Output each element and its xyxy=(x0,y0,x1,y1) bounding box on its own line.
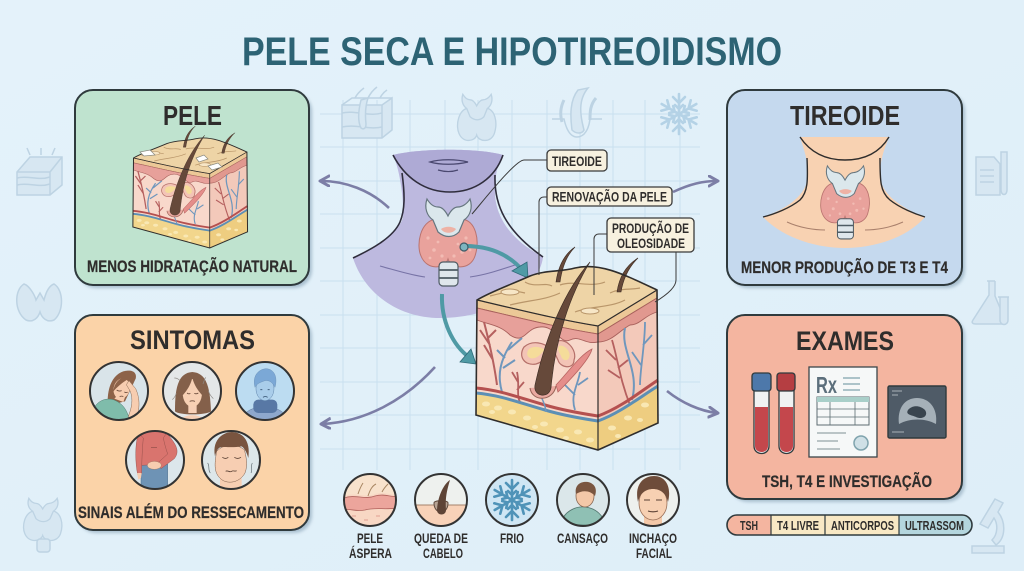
icon: woman with hair loss xyxy=(163,362,221,421)
faint icons right xyxy=(972,152,1009,553)
tab: tsh: TSH xyxy=(740,518,758,533)
panel: tireoide xyxy=(727,90,965,288)
thyroid gland xyxy=(419,199,477,286)
icon: lab report: Rx xyxy=(816,372,837,398)
label: produção de oleosidade: OLEOSIDADE xyxy=(617,235,685,251)
bottom labels: FRIO xyxy=(500,530,524,546)
test tabs xyxy=(727,515,972,535)
bottom labels: PELE xyxy=(357,530,383,546)
faint snowflake icon xyxy=(659,94,699,134)
label: produção de oleosidade: PRODUÇÃO DE xyxy=(612,219,689,236)
central grid xyxy=(320,100,700,470)
faint background icons xyxy=(17,87,602,552)
arrow: to sintomas xyxy=(322,367,435,424)
icon: inchaço facial xyxy=(627,474,679,528)
icon: man with facial swelling xyxy=(202,431,260,491)
icon: neck with thyroid xyxy=(763,137,925,248)
bottom labels xyxy=(349,530,677,561)
icon: person feeling cold xyxy=(236,362,294,426)
bottom labels: QUEDA DE xyxy=(414,530,468,546)
caption: tireoide: MENOR PRODUÇÃO DE T3 E T4 xyxy=(741,257,949,277)
bottom labels: FACIAL xyxy=(636,545,672,561)
arrow: to pele xyxy=(321,181,389,208)
caption: pele: MENOS HIDRATAÇÃO NATURAL xyxy=(87,256,297,276)
icon: queda de cabelo xyxy=(415,474,467,526)
icon: blood tubes xyxy=(752,373,795,454)
label: renovação da pele: RENOVAÇÃO DA PELE xyxy=(552,188,667,204)
label: tireoide: TIREOIDE xyxy=(552,153,602,169)
heading: pele: PELE xyxy=(163,100,222,131)
label: renovação da pele xyxy=(539,187,672,275)
heading: exames: EXAMES xyxy=(796,326,894,356)
icon: ultrasound xyxy=(888,386,946,438)
arrows: teal thyroid flow xyxy=(442,243,528,364)
icon: woman with headache xyxy=(90,362,148,425)
arrow: to exames xyxy=(667,391,717,413)
bottom labels: ÁSPERA xyxy=(349,545,392,561)
bottom labels: INCHAÇO xyxy=(629,530,677,546)
tab: ultrassom: ULTRASSOM xyxy=(905,518,964,533)
heading: sintomas: SINTOMAS xyxy=(130,325,255,355)
panel: exames xyxy=(727,315,965,502)
caption: exames: TSH, T4 E INVESTIGAÇÃO xyxy=(762,471,932,491)
bottom labels: CABELO xyxy=(423,545,463,561)
arrow: to tireoide xyxy=(673,181,717,192)
heading: tireoide: TIREOIDE xyxy=(790,100,900,131)
bottom labels: CANSAÇO xyxy=(557,530,608,546)
tab: t4 livre: T4 LIVRE xyxy=(777,518,819,533)
caption: sintomas: SINAIS ALÉM DO RESSECAMENTO xyxy=(78,503,304,522)
tab: anticorpos: ANTICORPOS xyxy=(831,518,894,533)
skin cross-section block xyxy=(476,247,658,450)
icon: cansaço xyxy=(557,474,609,526)
label: produção de oleosidade xyxy=(594,218,694,302)
icon: lab report xyxy=(809,367,877,457)
neck illustration xyxy=(353,150,543,318)
icon: pele áspera xyxy=(344,474,396,526)
icon: frio xyxy=(486,474,538,526)
label: tireoide xyxy=(472,150,607,214)
panel: sintomas xyxy=(75,315,312,533)
title: PELE SECA E HIPOTIREOIDISMO xyxy=(242,30,782,74)
icon: dry skin cube xyxy=(133,126,248,248)
icon: person with abdominal swelling xyxy=(126,430,184,491)
panel: pele xyxy=(75,90,312,288)
